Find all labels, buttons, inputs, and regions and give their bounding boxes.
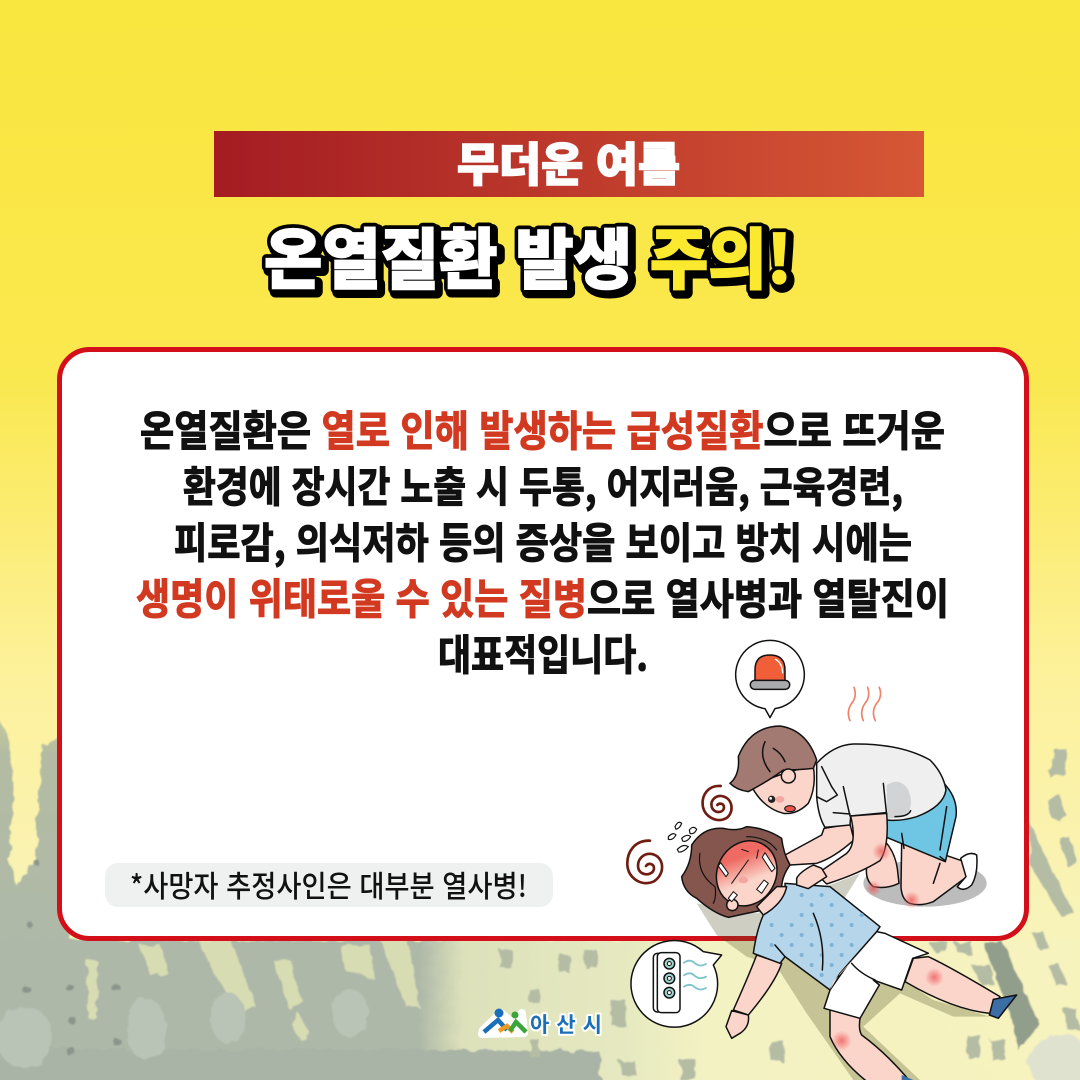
woman: lying patient (682, 827, 1017, 1080)
main heading: 온열질환 발생 주의! (267, 210, 795, 306)
illustration: first aid scene (627, 640, 1017, 1080)
logo text: 아산시 (530, 1009, 602, 1039)
body text: 온열질환은 열로 인해 발생하는 급성질환으로 뜨거운 (140, 398, 945, 459)
man: kneeling helper (730, 726, 977, 905)
body text: 피로감, 의식저하 등의 증상을 보이고 방치 시에는 (174, 510, 912, 571)
icon: sweat marks (668, 822, 697, 852)
note pill: *사망자 추정사인은 대부분 열사병! (130, 862, 527, 906)
shorts (883, 783, 956, 862)
main heading: 온열질환 발생 주의! (264, 207, 792, 303)
background: watery texture (0, 705, 1080, 1080)
icon: dizzy spirals (627, 786, 732, 883)
near leg (901, 843, 967, 905)
hand on shoulder (797, 865, 827, 889)
title banner (214, 129, 924, 197)
body text (136, 398, 949, 683)
back arm (785, 824, 854, 865)
body text: 환경에 장시간 노출 시 두통, 어지러움, 근육경련, (183, 454, 903, 515)
body text: 생명이 위태로울 수 있는 질병으로 열사병과 열탈진이 (136, 566, 949, 627)
body text: 대표적입니다. (438, 622, 648, 683)
shoe (957, 853, 977, 889)
tee (753, 883, 880, 990)
icon: siren bubble (736, 640, 804, 718)
knee redness (832, 842, 944, 1051)
legs (905, 957, 1000, 1013)
banner text: 무더운 여름 (457, 129, 680, 195)
shadow under people (697, 860, 990, 1080)
icon: air conditioner bubble (631, 941, 722, 1027)
neck (757, 887, 787, 915)
hair (682, 827, 790, 917)
front arm (817, 813, 887, 884)
arm (733, 955, 782, 1015)
shirt (817, 744, 946, 827)
panel: description card (60, 350, 1026, 938)
main heading: 온열질환 발생 주의! (264, 207, 792, 303)
logo: Asan city (482, 1008, 602, 1039)
face (705, 830, 788, 917)
icon: heat waves (848, 687, 881, 721)
shorts (824, 932, 928, 1018)
far knee (866, 843, 899, 887)
head (752, 767, 814, 814)
